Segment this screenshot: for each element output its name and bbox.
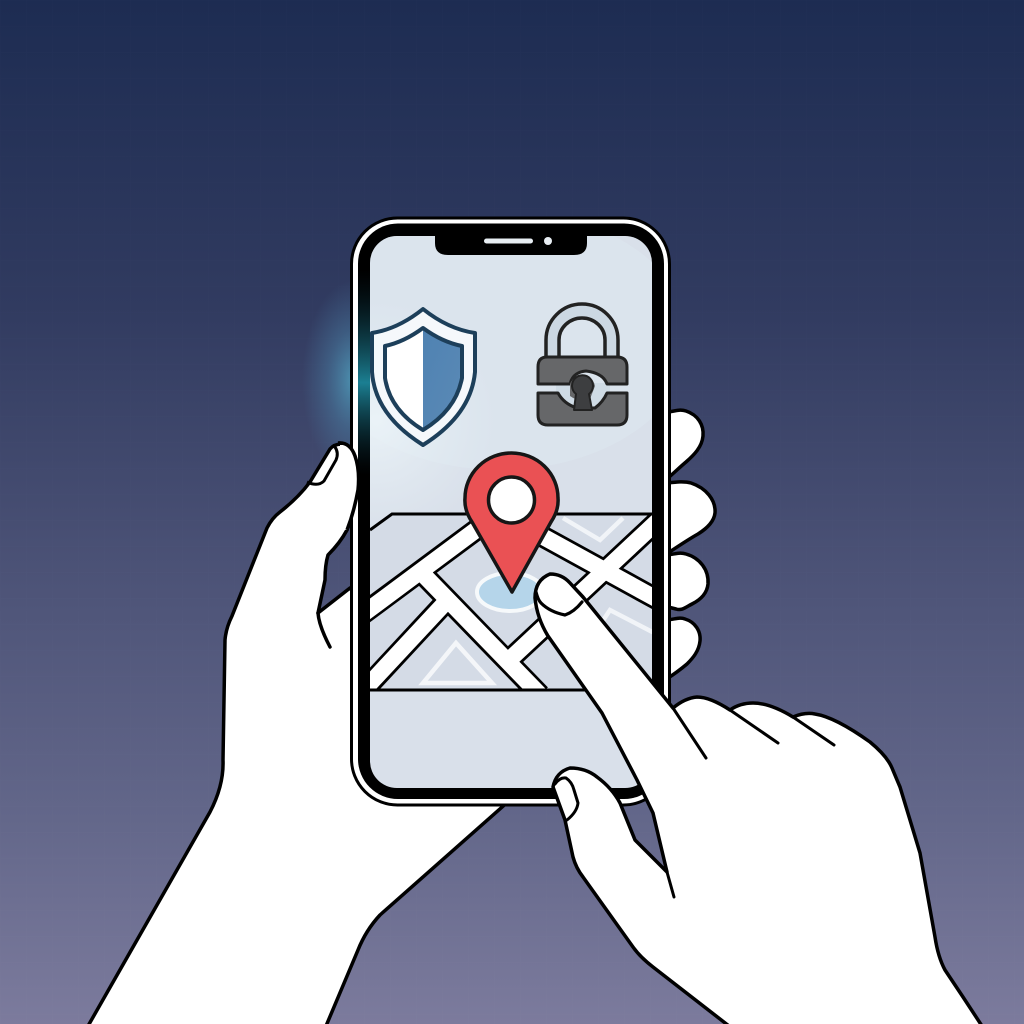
palm crease [318, 613, 330, 647]
thumb nail [555, 778, 578, 820]
glow behind phone [302, 280, 406, 480]
bezel glow [358, 270, 370, 475]
pin hole [488, 477, 534, 523]
right hand silhouette [535, 574, 982, 1024]
left hand palm [88, 444, 510, 1024]
left thumb tip [307, 443, 359, 530]
phone [350, 216, 671, 806]
lock lower body [538, 393, 627, 425]
back fingers of left hand [668, 410, 715, 678]
screen [370, 236, 652, 788]
thumb nail [307, 447, 337, 484]
phone body [352, 218, 670, 805]
lock gap [556, 383, 610, 410]
map edges [370, 514, 652, 690]
index finger nail [536, 592, 582, 615]
location ellipse [477, 573, 543, 611]
screen glow [370, 236, 652, 478]
map [370, 512, 652, 692]
right hand [535, 574, 982, 1024]
road fills [370, 516, 652, 688]
icon: shield [372, 309, 475, 445]
map base [370, 514, 652, 690]
index inner lines [667, 708, 834, 897]
notch [435, 234, 587, 255]
road outlines [360, 517, 662, 695]
icon: map pin [465, 453, 558, 592]
camera [544, 237, 552, 245]
keyhole surround [570, 375, 595, 400]
speaker [484, 238, 533, 244]
keyhole [572, 375, 593, 410]
icon: padlock [538, 304, 627, 425]
map blocks outlines [370, 516, 652, 688]
shackle [546, 304, 618, 358]
lock upper body [538, 357, 627, 384]
